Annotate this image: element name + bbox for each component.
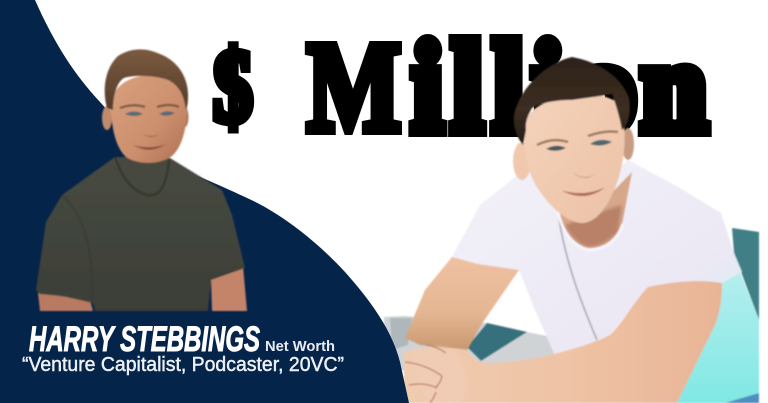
t-shirt — [452, 160, 742, 358]
right eyebrow — [588, 132, 618, 136]
collar — [115, 157, 169, 195]
table — [384, 316, 556, 372]
torso lower cyan — [660, 272, 759, 403]
word: Million: l — [493, 16, 524, 158]
table dark reflection — [467, 323, 527, 361]
hair — [105, 49, 188, 110]
left arm skin — [38, 293, 93, 311]
neck shadow — [565, 205, 622, 247]
head — [513, 57, 634, 223]
mouth — [133, 144, 166, 150]
left portrait: man in dark t-shirt — [36, 49, 247, 311]
shirt fold line — [558, 213, 597, 340]
word: Million: i — [412, 16, 443, 158]
word: Million: M — [307, 16, 401, 158]
collar — [557, 208, 623, 250]
right brow — [157, 105, 179, 107]
right eye — [590, 140, 612, 146]
left eyebrow — [537, 140, 568, 145]
t-shirt — [36, 157, 245, 311]
subtitle: “Venture Capitalist, Podcaster, 20VC” — [22, 354, 344, 376]
chair back — [732, 228, 759, 320]
nose shadow — [572, 172, 598, 178]
right ear — [622, 128, 634, 160]
right eye — [159, 111, 175, 116]
forearm and hands — [404, 281, 722, 403]
hand knuckles — [410, 347, 467, 403]
sleeve shading — [62, 195, 92, 300]
net worth label: Net Worth — [265, 338, 335, 355]
word: Million: o — [570, 16, 636, 158]
right arm skin — [211, 266, 247, 311]
headline: $ Million — [213, 16, 707, 158]
left ear — [102, 106, 112, 130]
hair — [514, 57, 630, 145]
neck — [556, 172, 632, 248]
name: HARRY STEBBINGS — [29, 320, 260, 359]
left ear — [513, 142, 531, 180]
left eye — [125, 112, 143, 116]
right ear — [182, 107, 188, 127]
face — [524, 94, 625, 223]
left brow — [120, 105, 145, 108]
navy curved panel — [0, 0, 409, 403]
jeans hint — [725, 393, 759, 403]
mouth — [563, 188, 604, 196]
word: Million: i — [532, 16, 563, 158]
word: Million: l — [452, 16, 483, 158]
caption block — [22, 320, 344, 376]
left eye — [546, 146, 566, 151]
clasped fingers — [405, 345, 446, 403]
left arm — [405, 257, 519, 350]
nose shadow — [143, 134, 160, 137]
face — [111, 75, 187, 163]
table pattern — [390, 318, 412, 350]
dollar sign: $ — [213, 29, 253, 144]
word: Million: n — [641, 16, 707, 158]
right portrait: man in white t-shirt — [384, 57, 759, 403]
